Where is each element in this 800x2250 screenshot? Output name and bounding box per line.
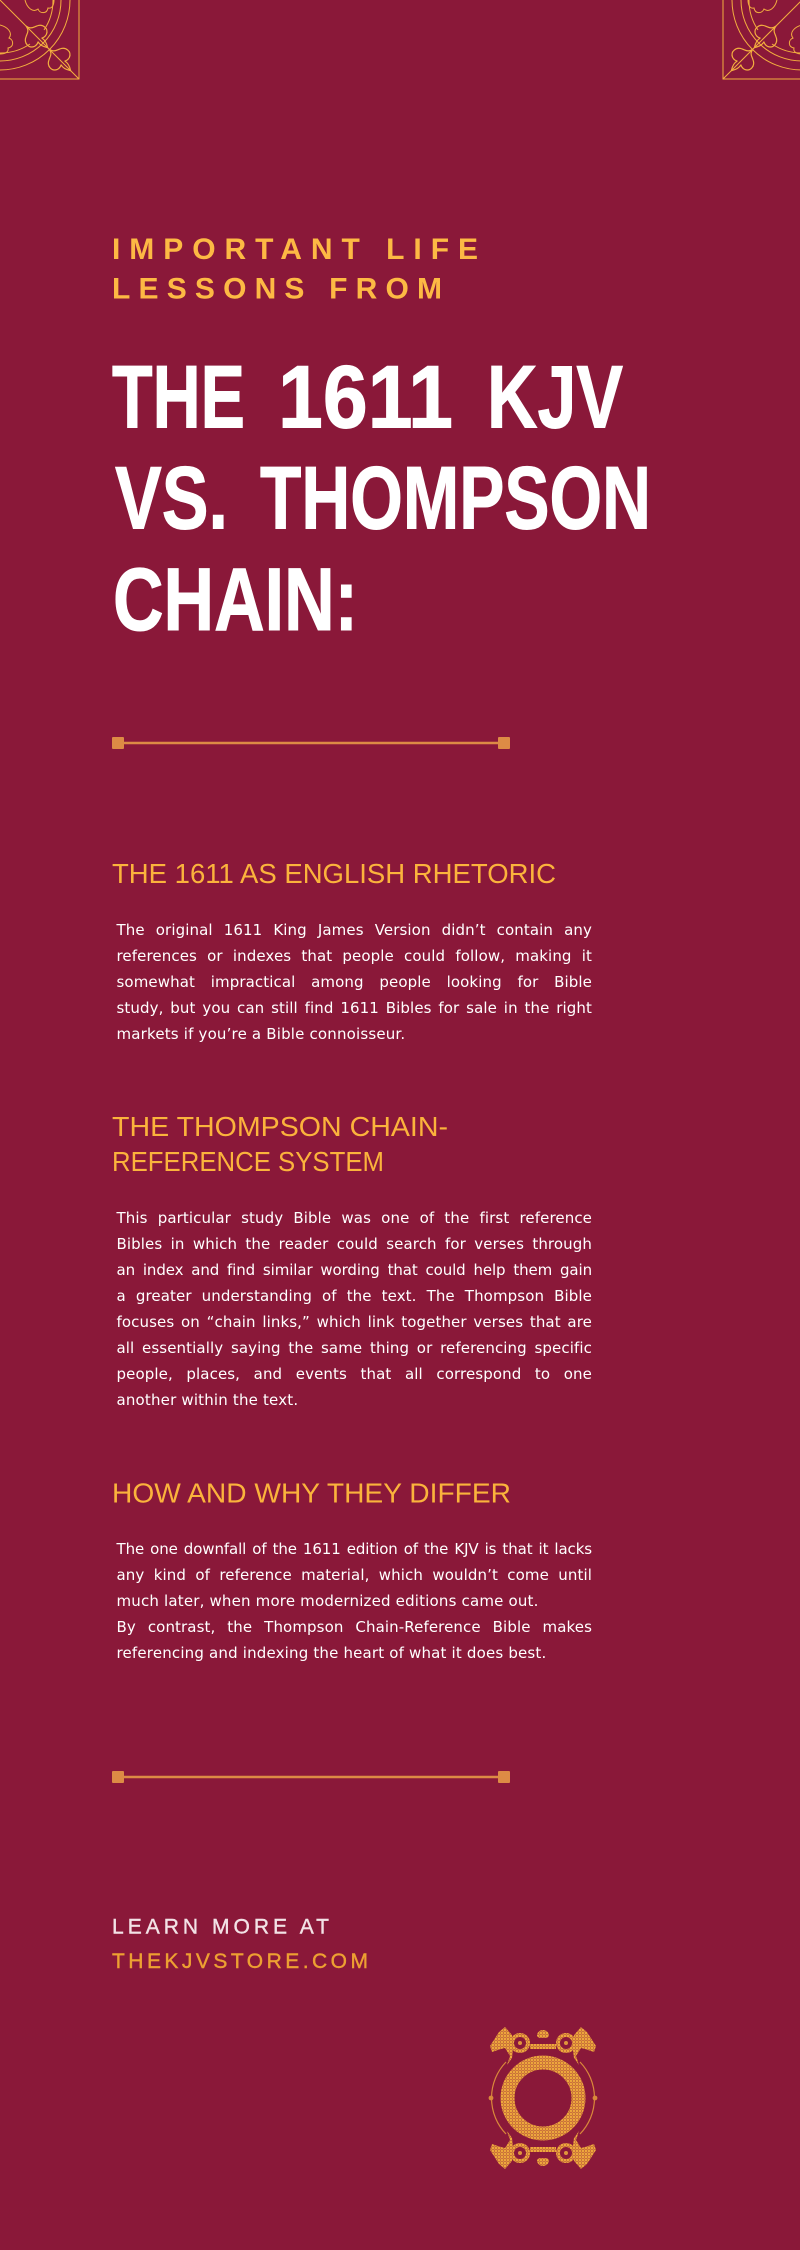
text block: how and why they differ: any kind of reference material, which wouldn’t come until (116, 1566, 592, 1584)
text block: the 1611 as English rhetoric (116, 921, 592, 1043)
heading: how and why they differ: HOW AND WHY THEY DIFFER (112, 1478, 511, 1508)
text block: the Thompson Chain-Reference system: people, places, and events that all correspond to one (116, 1365, 592, 1383)
heading: the Thompson Chain-Reference system (112, 1111, 448, 1177)
text block: the 1611 as English rhetoric: somewhat impractical among people looking for Bible (116, 973, 592, 991)
text block: the Thompson Chain-Reference system (116, 1209, 592, 1409)
text block: how and why they differ: The one downfall of the 1611 edition of the KJV is that it lacks (116, 1540, 592, 1558)
call to action: learn more: LEARN MORE AT (112, 1916, 329, 1938)
text block: the Thompson Chain-Reference system: an index and find similar wording that could help them gain (116, 1261, 592, 1279)
text block: the Thompson Chain-Reference system: Bibles in which the reader could search for verses through (116, 1235, 592, 1253)
title: VS. (115, 448, 228, 548)
text block: the 1611 as English rhetoric: references or indexes that people could follow, making it (116, 947, 592, 965)
text block: how and why they differ (116, 1540, 592, 1662)
text block: the 1611 as English rhetoric: The original 1611 King James Version didn’t contain any (116, 921, 592, 939)
title (112, 350, 651, 645)
text block: the Thompson Chain-Reference system: another within the text. (116, 1391, 298, 1409)
text block: the 1611 as English rhetoric: markets if you’re a Bible connoisseur. (116, 1025, 405, 1043)
call to action: learn more (112, 1916, 368, 1973)
kicker heading (112, 233, 478, 306)
text block: the Thompson Chain-Reference system: all essentially saying the same thing or referencing specific (116, 1339, 592, 1357)
icon: ornamental wreath (488, 2027, 598, 2169)
text block: how and why they differ: much later, when more modernized editions came out. (116, 1592, 539, 1610)
text block: how and why they differ: referencing and indexing the heart of what it does best. (116, 1644, 546, 1662)
heading: the Thompson Chain-Reference system: THE THOMPSON CHAIN- (112, 1111, 448, 1142)
call to action: learn more: THEKJVSTORE.COM (112, 1950, 368, 1973)
text block: the Thompson Chain-Reference system: a greater understanding of the text. The Thompson Bible (116, 1287, 592, 1305)
text block: how and why they differ: By contrast, the Thompson Chain-Reference Bible makes (116, 1618, 592, 1636)
text block: the 1611 as English rhetoric: study, but you can still find 1611 Bibles for sale in the right (116, 999, 592, 1017)
kicker heading: IMPORTANT LIFE (112, 233, 478, 266)
text block: the Thompson Chain-Reference system: This particular study Bible was one of the first reference (116, 1209, 592, 1227)
text block: the Thompson Chain-Reference system: focuses on “chain links,” which link together verses that are (116, 1313, 592, 1331)
kicker heading: LESSONS FROM (112, 272, 442, 306)
heading: the Thompson Chain-Reference system: REFERENCE SYSTEM (112, 1146, 384, 1177)
heading: the 1611 as English rhetoric: THE 1611 AS ENGLISH RHETORIC (112, 858, 556, 889)
divider: bottom (112, 1771, 510, 1783)
icon: top right corner ornament (722, 0, 800, 80)
icon: top left corner ornament (0, 0, 80, 80)
divider: top (112, 737, 510, 749)
